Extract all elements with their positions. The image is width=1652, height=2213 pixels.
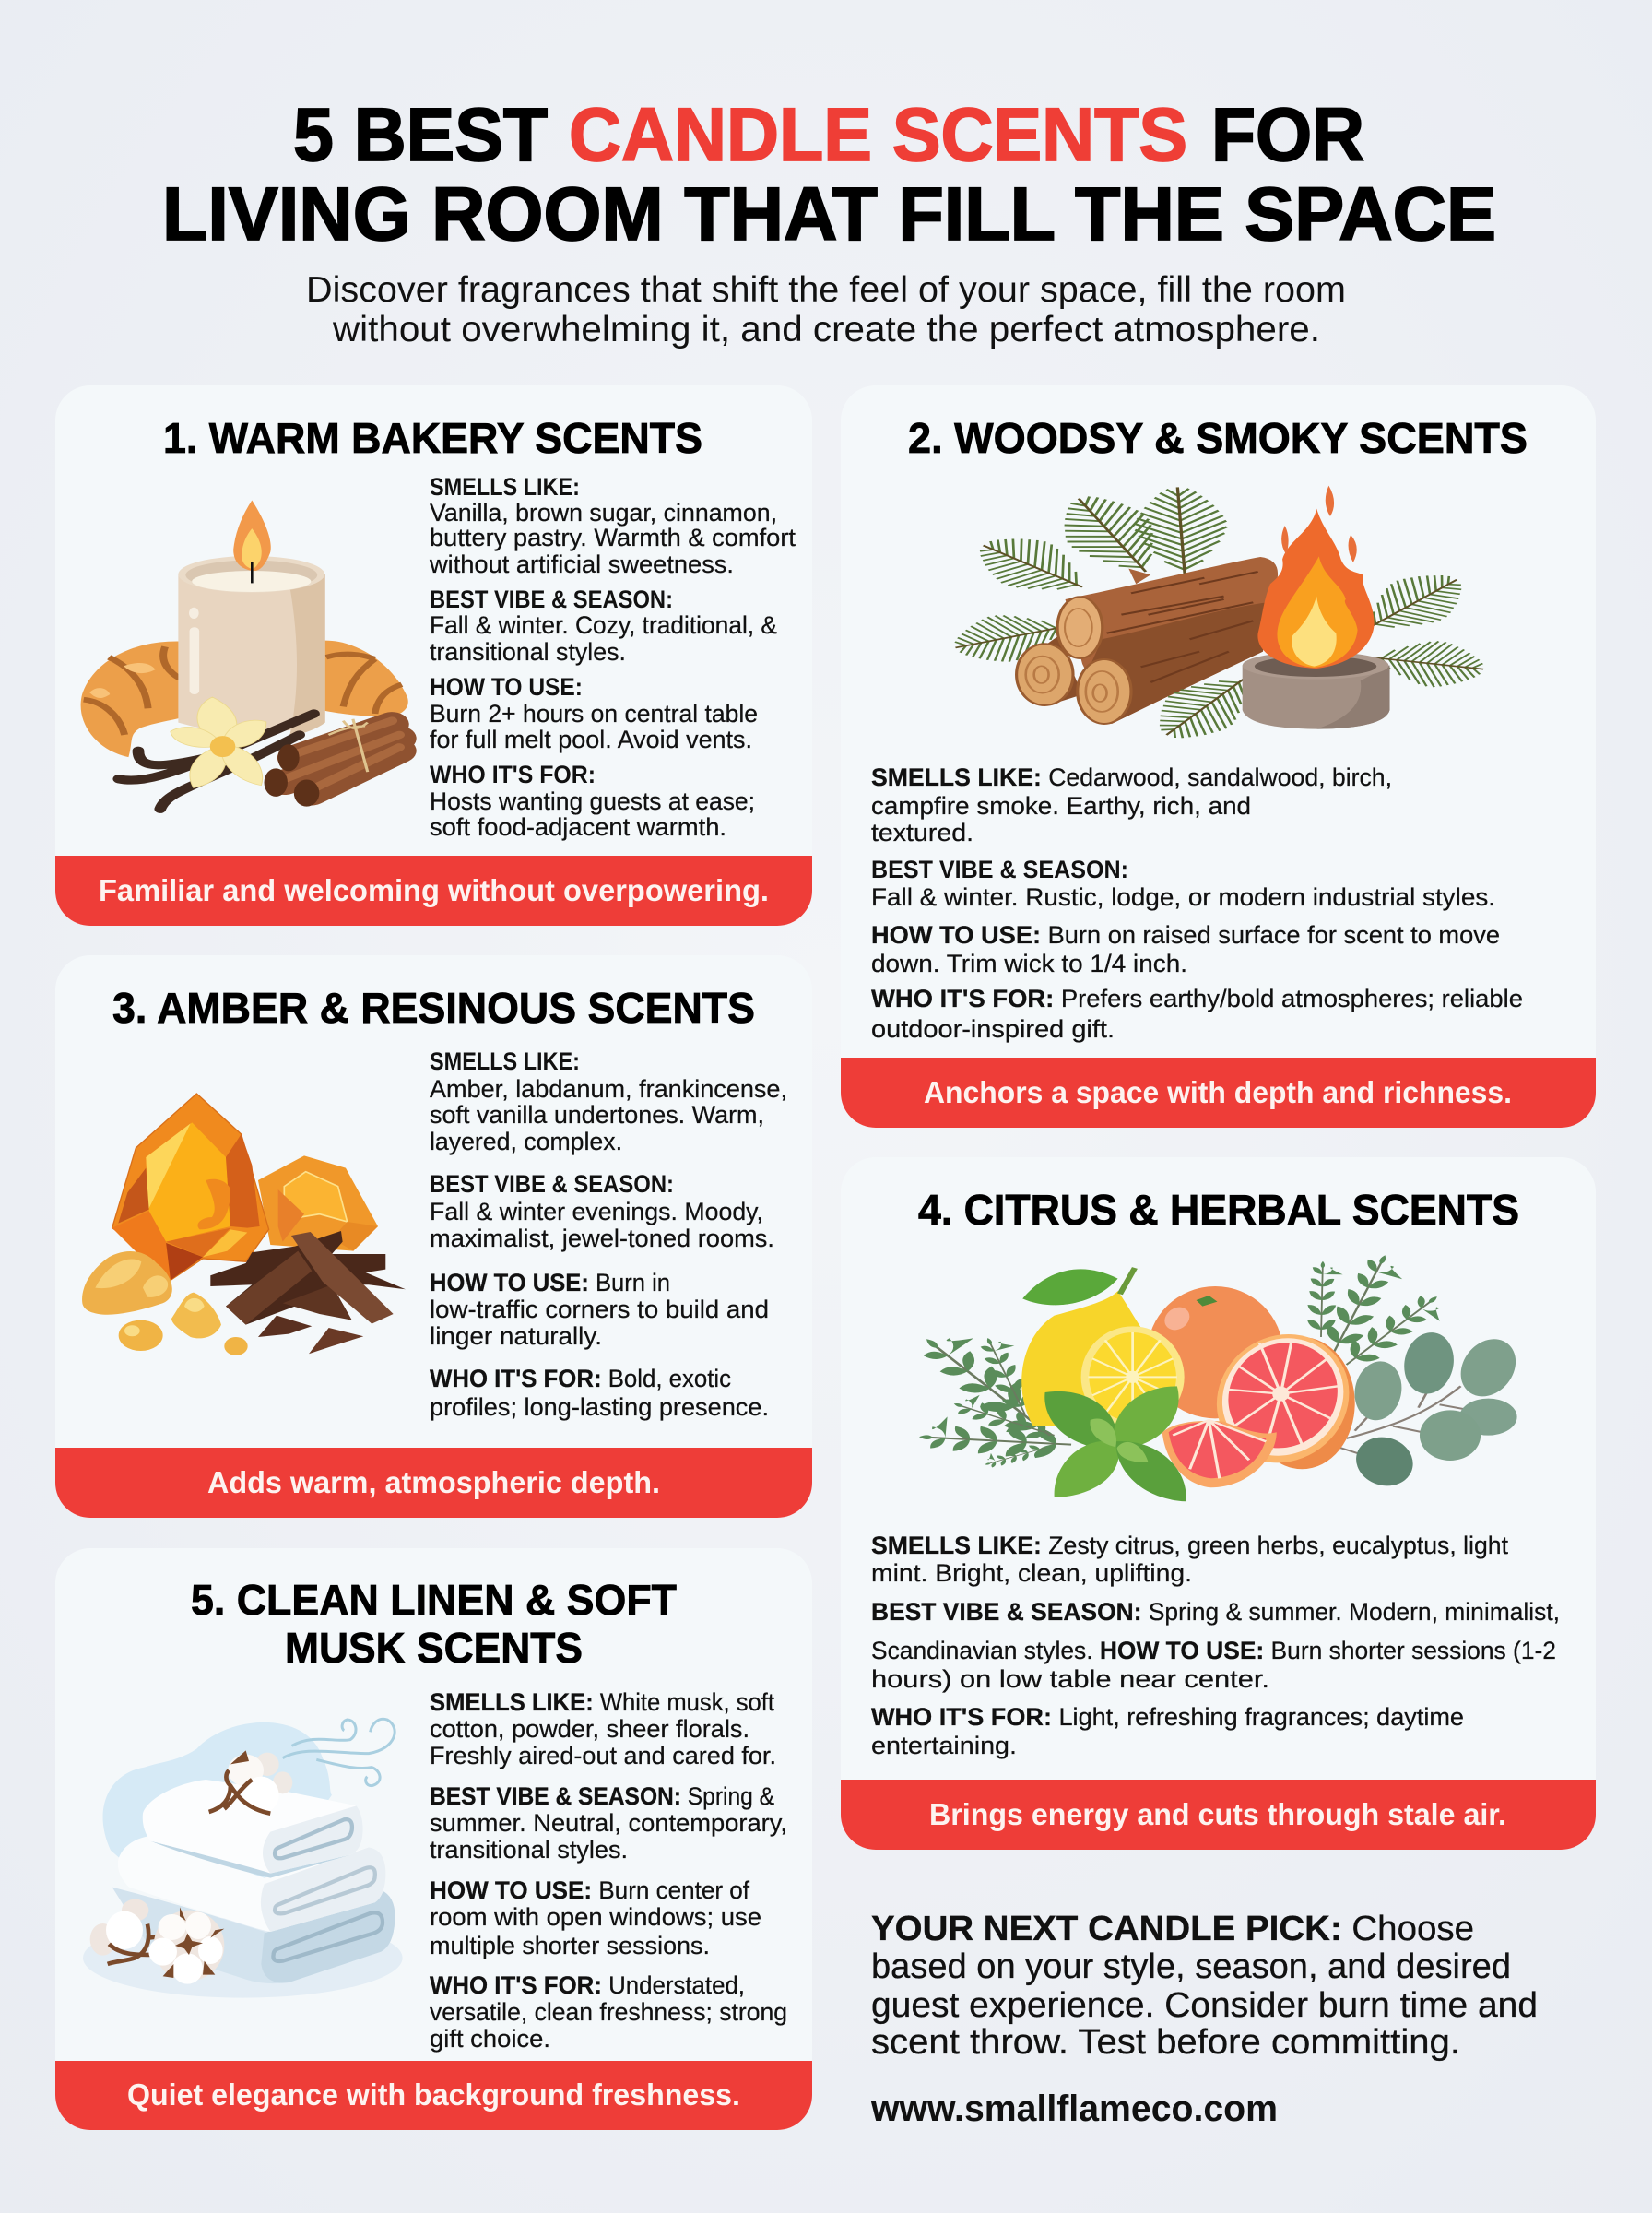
icon: candle with croissants, vanilla and cinnamon <box>81 500 408 809</box>
heading: warm bakery: 1. WARM BAKERY SCENTS <box>163 414 702 462</box>
callout: your next candle pick: YOUR NEXT CANDLE PICK: Choose <box>871 1910 1474 1948</box>
body text: Scandinavian styles. HOW TO USE: Burn shorter sessions (1-2 <box>871 1637 1556 1664</box>
body text: multiple shorter sessions. <box>430 1932 710 1959</box>
banner: Familiar and welcoming without overpowering. <box>99 873 769 907</box>
icon: logs, pine and fire <box>945 484 1490 751</box>
banner <box>55 2061 812 2130</box>
body text: Fall & winter evenings. Moody, <box>430 1198 763 1225</box>
subtitle: Discover fragrances that shift the feel of your space, fill the room <box>306 270 1346 310</box>
body text: for full melt pool. Avoid vents. <box>430 726 752 753</box>
body text: BEST VIBE & SEASON: Spring & summer. Modern, minimalist, <box>871 1598 1560 1626</box>
body text: SMELLS LIKE: Cedarwood, sandalwood, birch, <box>871 763 1392 791</box>
body text: layered, complex. <box>430 1128 622 1155</box>
body text: WHO IT'S FOR: Bold, exotic <box>430 1365 731 1392</box>
body text: entertaining. <box>871 1732 1017 1759</box>
panel: citrus and herbal scents <box>841 1157 1596 1850</box>
body text: HOW TO USE: <box>430 673 583 701</box>
callout: your next candle pick: guest experience. Consider burn time and <box>871 1986 1538 2025</box>
body text: mint. Bright, clean, uplifting. <box>871 1559 1192 1587</box>
banner: Brings energy and cuts through stale air. <box>929 1797 1506 1831</box>
body text: hours) on low table near center. <box>871 1665 1269 1693</box>
body text: WHO IT'S FOR: Light, refreshing fragrances; daytime <box>871 1703 1464 1731</box>
body text: SMELLS LIKE: White musk, soft <box>430 1688 774 1716</box>
body text: down. Trim wick to 1/4 inch. <box>871 950 1187 977</box>
body text <box>430 1688 787 2053</box>
body text: campfire smoke. Earthy, rich, and <box>871 792 1251 820</box>
body text: summer. Neutral, contemporary, <box>430 1809 787 1837</box>
body text <box>871 763 1523 1043</box>
banner <box>841 1058 1596 1128</box>
body text: SMELLS LIKE: <box>430 1047 580 1075</box>
body text: Fall & winter. Cozy, traditional, & <box>430 611 777 639</box>
body text: transitional styles. <box>430 1836 628 1864</box>
body text: HOW TO USE: Burn center of <box>430 1876 749 1904</box>
body text: Burn 2+ hours on central table <box>430 700 758 728</box>
callout: your next candle pick: scent throw. Test before committing. <box>871 2023 1460 2062</box>
panel: woodsy and smoky scents <box>841 385 1596 1128</box>
body text: WHO IT'S FOR: Understated, <box>430 1971 745 1999</box>
banner: Adds warm, atmospheric depth. <box>207 1465 660 1499</box>
body text: BEST VIBE & SEASON: <box>430 586 673 613</box>
body text: maximalist, jewel-toned rooms. <box>430 1225 774 1252</box>
body text: HOW TO USE: Burn in <box>430 1269 670 1296</box>
body text: low-traffic corners to build and <box>430 1296 769 1323</box>
panel: warm bakery scents <box>55 385 812 926</box>
body text: cotton, powder, sheer florals. <box>430 1715 749 1743</box>
body text: buttery pastry. Warmth & comfort <box>430 524 796 551</box>
panel: amber and resinous scents <box>55 955 812 1518</box>
heading: clean linen <box>191 1576 677 1672</box>
callout: your next candle pick: based on your style, season, and desired <box>871 1947 1511 1986</box>
body text: outdoor-inspired gift. <box>871 1015 1115 1043</box>
body text: linger naturally. <box>430 1322 602 1350</box>
subtitle: without overwhelming it, and create the perfect atmosphere. <box>332 310 1320 349</box>
heading: woodsy: 2. WOODSY & SMOKY SCENTS <box>908 414 1528 462</box>
heading: amber: 3. AMBER & RESINOUS SCENTS <box>112 984 755 1032</box>
banner <box>841 1780 1596 1850</box>
callout: your next candle pick <box>871 1910 1538 2062</box>
body text: soft food-adjacent warmth. <box>430 813 726 841</box>
body text: profiles; long-lasting presence. <box>430 1393 769 1421</box>
body text: without artificial sweetness. <box>429 550 734 578</box>
title: FOR <box>1211 93 1364 177</box>
body text <box>429 473 796 841</box>
body text: Vanilla, brown sugar, cinnamon, <box>430 499 777 527</box>
icon: amber gems and wood chips <box>82 1094 406 1355</box>
body text: versatile, clean freshness; strong <box>430 1998 787 2026</box>
icon: citrus fruit and herbs <box>908 1250 1524 1501</box>
body text: HOW TO USE: Burn on raised surface for scent to move <box>871 921 1500 949</box>
body text: Hosts wanting guests at ease; <box>430 787 755 815</box>
banner: Quiet elegance with background freshness. <box>127 2077 740 2112</box>
body text: SMELLS LIKE: Zesty citrus, green herbs, eucalyptus, light <box>871 1532 1508 1559</box>
title: LIVING ROOM THAT FILL THE SPACE <box>162 172 1496 256</box>
banner <box>55 856 812 926</box>
body text <box>430 1047 787 1421</box>
body text: room with open windows; use <box>430 1903 761 1931</box>
panel: clean linen and soft musk scents <box>55 1548 812 2130</box>
heading: clean linen: 5. CLEAN LINEN & SOFT <box>191 1576 677 1624</box>
heading: citrus: 4. CITRUS & HERBAL SCENTS <box>918 1186 1519 1234</box>
banner: Anchors a space with depth and richness. <box>924 1075 1512 1109</box>
body text: SMELLS LIKE: <box>430 473 580 501</box>
subtitle <box>306 270 1346 349</box>
body text: gift choice. <box>430 2025 550 2053</box>
body text: BEST VIBE & SEASON: Spring & <box>430 1782 774 1810</box>
body text: soft vanilla undertones. Warm, <box>430 1101 764 1129</box>
body text: Fall & winter. Rustic, lodge, or modern industrial styles. <box>871 883 1495 911</box>
body text: WHO IT'S FOR: Prefers earthy/bold atmospheres; reliable <box>871 985 1523 1012</box>
title: CANDLE SCENTS <box>569 93 1187 177</box>
body text: Amber, labdanum, frankincense, <box>430 1075 787 1103</box>
body text: textured. <box>871 819 974 846</box>
heading: clean linen: MUSK SCENTS <box>285 1624 583 1672</box>
body text: transitional styles. <box>430 638 626 666</box>
body text <box>871 1532 1560 1759</box>
banner <box>55 1448 812 1518</box>
website url: www.smallflameco.com <box>870 2089 1278 2129</box>
icon: folded towels with cotton <box>83 1719 403 1998</box>
body text: BEST VIBE & SEASON: <box>871 856 1128 883</box>
body text: BEST VIBE & SEASON: <box>430 1170 674 1198</box>
title <box>162 93 1496 256</box>
body text: Freshly aired-out and cared for. <box>430 1742 776 1769</box>
body text: WHO IT'S FOR: <box>430 761 596 788</box>
title: 5 BEST <box>293 93 548 177</box>
